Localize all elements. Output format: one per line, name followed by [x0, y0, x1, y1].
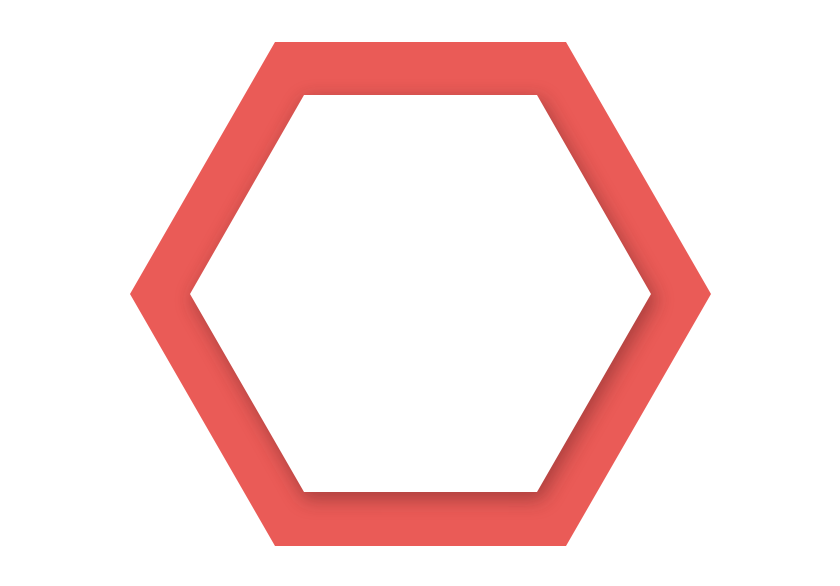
inner white hexagon [190, 95, 651, 492]
hexagon frame graphic [130, 42, 711, 546]
inner shadow [192, 99, 657, 500]
outer red hexagon [130, 42, 711, 546]
